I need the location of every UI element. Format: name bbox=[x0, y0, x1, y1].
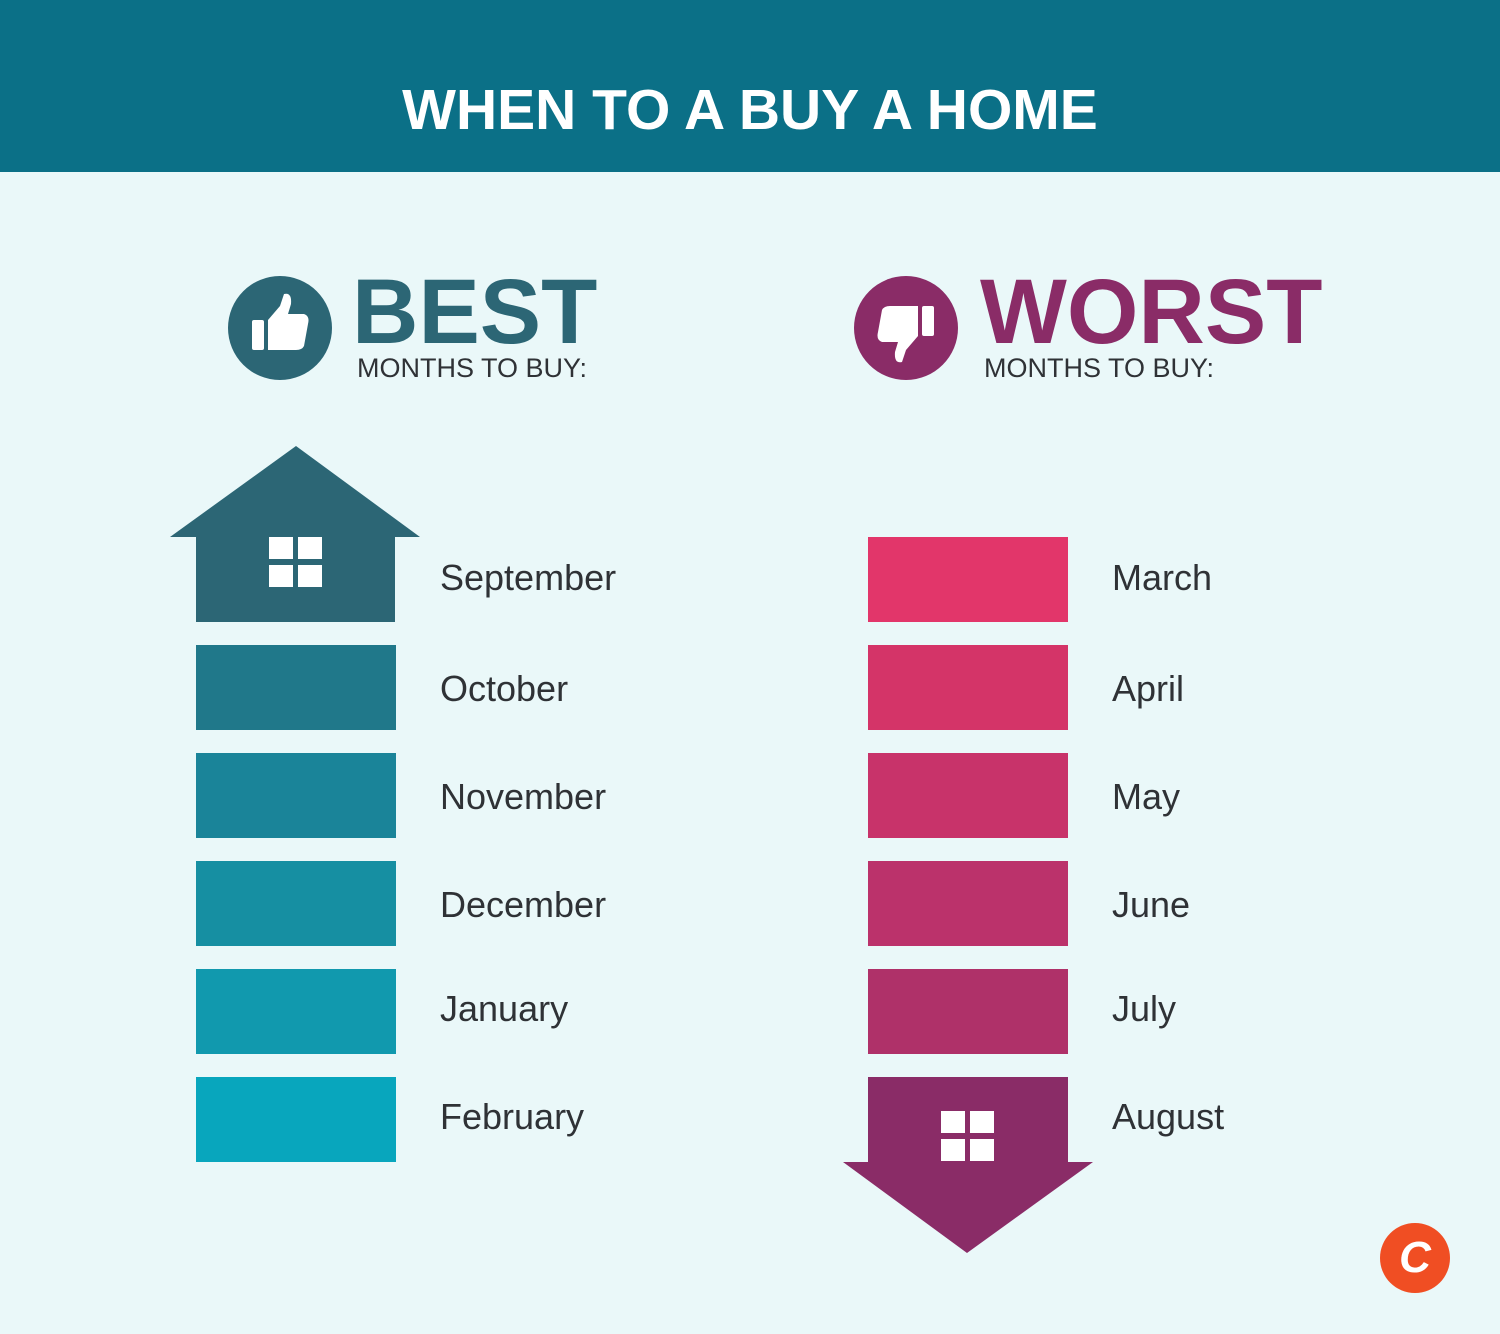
bar: march bbox=[868, 537, 1068, 622]
best labels: September bbox=[440, 557, 616, 598]
worst labels: May bbox=[1112, 776, 1180, 817]
icon: thumbs down bbox=[854, 276, 958, 380]
heading: worst: MONTHS TO BUY: bbox=[984, 353, 1214, 383]
bar: april bbox=[868, 645, 1068, 730]
best column: house stack bbox=[170, 446, 420, 1162]
bar: may bbox=[868, 753, 1068, 838]
heading: worst: WORST bbox=[980, 261, 1322, 363]
worst labels bbox=[1112, 557, 1224, 1137]
bar: november bbox=[196, 753, 396, 838]
worst labels: July bbox=[1112, 988, 1176, 1029]
worst labels: April bbox=[1112, 668, 1184, 709]
bar: october bbox=[196, 645, 396, 730]
logo: C bbox=[1399, 1233, 1431, 1282]
house top bbox=[170, 446, 420, 622]
bar: december bbox=[196, 861, 396, 946]
best labels: October bbox=[440, 668, 568, 709]
heading: best: MONTHS TO BUY: bbox=[357, 353, 587, 383]
worst column: arrow stack bbox=[843, 537, 1093, 1253]
best labels bbox=[440, 557, 616, 1137]
icon: thumbs up bbox=[228, 276, 332, 380]
bar: july bbox=[868, 969, 1068, 1054]
logo bbox=[1380, 1223, 1450, 1293]
worst labels: June bbox=[1112, 884, 1190, 925]
title: WHEN TO A BUY A HOME bbox=[402, 78, 1098, 142]
best labels: November bbox=[440, 776, 606, 817]
best labels: December bbox=[440, 884, 606, 925]
worst labels: March bbox=[1112, 557, 1212, 598]
arrow bottom bbox=[843, 1077, 1093, 1253]
worst labels: August bbox=[1112, 1096, 1224, 1137]
bar: june bbox=[868, 861, 1068, 946]
best labels: January bbox=[440, 988, 568, 1029]
bar: february bbox=[196, 1077, 396, 1162]
heading: best: BEST bbox=[352, 261, 597, 363]
header banner bbox=[0, 0, 1500, 172]
best labels: February bbox=[440, 1096, 584, 1137]
bar: january bbox=[196, 969, 396, 1054]
